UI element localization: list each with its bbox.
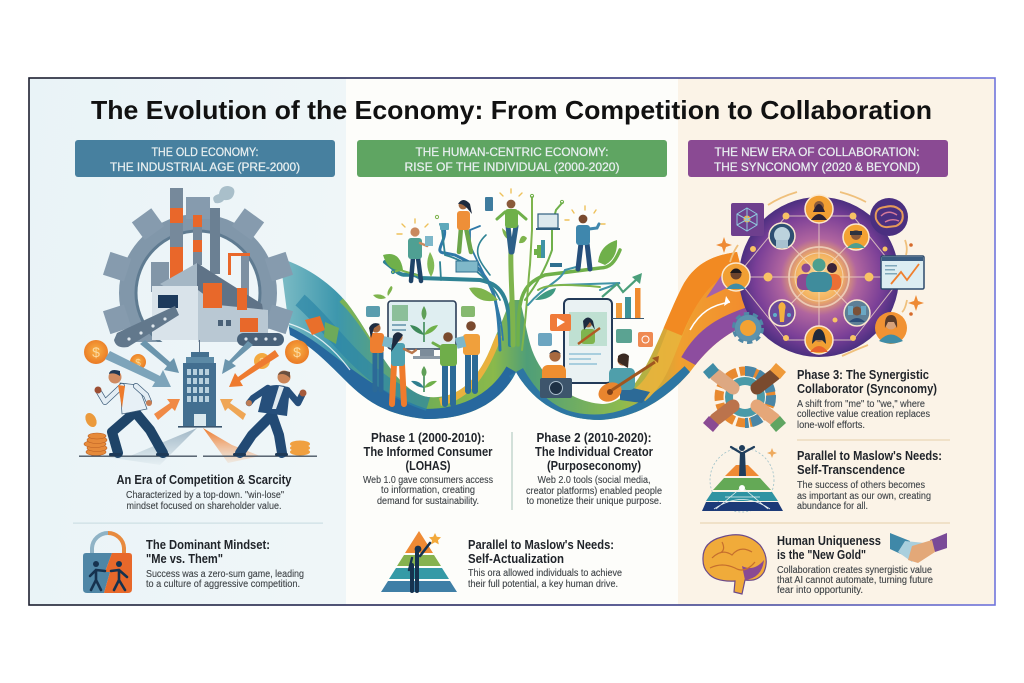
arrows toward tower <box>105 340 279 420</box>
text: phase 2: to monetize their unique purpose. <box>526 496 662 507</box>
tree gadgets <box>440 197 562 272</box>
text: phase 3 <box>797 368 937 431</box>
text: self-transcendence: Parallel to Maslow's Needs: <box>797 449 942 463</box>
text: phase 1: Web 1.0 gave consumers access <box>363 475 493 486</box>
text: self-actualization: Parallel to Maslow's Needs: <box>468 538 614 552</box>
icon: network tile <box>731 203 764 236</box>
figure: guitarist <box>595 354 659 405</box>
figure: man with tablet on branch <box>397 219 433 281</box>
text: human uniqueness <box>777 534 933 596</box>
panel: old economy contents <box>73 140 335 593</box>
heading: old economy: THE OLD ECONOMY: <box>152 145 258 159</box>
text: era of competition <box>116 473 292 512</box>
text: self-actualization: This ora allowed individuals to achieve <box>468 568 622 579</box>
icon: brain <box>703 535 766 594</box>
heading: human-centric economy <box>357 140 667 177</box>
icon: smartphone with creator <box>564 299 612 383</box>
text: phase 2: creator platforms) enabled people <box>526 486 662 497</box>
center people <box>797 258 841 292</box>
text: phase 3: collective value creation replaces <box>797 409 930 420</box>
text: phase 1: The Informed Consumer <box>364 445 493 459</box>
text: phase 2: The Individual Creator <box>535 445 653 459</box>
heading: new era <box>688 140 948 177</box>
text: phase 3: Phase 3: The Synergistic <box>797 368 929 382</box>
figure: running man, white shirt <box>94 370 169 456</box>
panel: collaboration background <box>678 78 995 605</box>
ground shadows <box>79 428 317 465</box>
icon: coins: $ <box>293 344 301 360</box>
icon: desktop with plant <box>366 301 475 392</box>
tree of circuit branches <box>385 194 620 350</box>
icon: gear <box>103 197 293 342</box>
icon: hands on gear <box>703 363 786 432</box>
text: phase 1: demand for sustainability. <box>377 496 479 507</box>
heading: human-centric economy: THE HUMAN-CENTRIC ECONOMY: <box>416 145 608 159</box>
text: phase 1: Phase 1 (2000-2010): <box>371 431 485 445</box>
figure: group at desktop <box>369 321 480 404</box>
figure: man with phone on branch <box>565 206 605 269</box>
text: phase 3: lone-wolf efforts. <box>797 420 865 431</box>
panel: human-centric contents <box>357 140 667 592</box>
text: self-actualization: their full potential, a key human drive. <box>468 579 618 590</box>
panel: collaboration contents <box>688 140 950 596</box>
icon: gear with orange core <box>734 314 762 342</box>
infographic <box>28 77 996 606</box>
flowing ribbon <box>282 252 748 420</box>
text: phase 2 <box>526 431 662 507</box>
icons: social bubbles <box>538 314 653 347</box>
chart: rising bars and arrow <box>602 273 644 319</box>
text: dominant mindset <box>146 538 304 590</box>
text: self-transcendence: Self-Transcendence <box>797 463 905 477</box>
text: self-actualization: Self-Actualization <box>468 552 564 566</box>
icon: dashboard chart <box>881 256 924 289</box>
text: era of competition: mindset focused on shareholder value. <box>126 501 282 512</box>
icon: office tower <box>178 340 222 428</box>
text: era of competition: An Era of Competition & Scarcity <box>116 473 292 487</box>
heading: old economy: THE INDUSTRIAL AGE (PRE-2000) <box>110 160 300 174</box>
title: The Evolution of the Economy: From Competition to Collaboration <box>91 95 932 125</box>
icon: handshake <box>890 533 947 563</box>
text: phase 1: (LOHAS) <box>406 459 450 473</box>
text: phase 3: A shift from "me" to "we," where <box>797 399 925 410</box>
icon: lock with opposing figures <box>83 533 132 593</box>
tree leaves <box>373 228 617 301</box>
heading: new era: THE SYNCONOMY (2020 & BEYOND) <box>714 160 920 174</box>
text: phase 2: Phase 2 (2010-2020): <box>536 431 652 445</box>
text: human uniqueness: is the "New Gold" <box>777 548 866 562</box>
icon: coins: $ <box>135 358 141 369</box>
text: dominant mindset: Success was a zero-sum game, leading <box>146 569 304 580</box>
text: phase 2: Web 2.0 tools (social media, <box>538 475 650 486</box>
icon: transcendence pyramid <box>702 445 783 512</box>
icon: maslow pyramid with figure <box>381 531 457 592</box>
text: human uniqueness: Collaboration creates synergistic value <box>777 565 932 576</box>
text: human uniqueness: Human Uniqueness <box>777 534 881 548</box>
text: dominant mindset: "Me vs. Them" <box>146 552 223 566</box>
text: human uniqueness: fear into opportunity. <box>777 585 863 596</box>
text: human uniqueness: that AI cannot automate, turning future <box>777 575 933 586</box>
panel: human-centric background <box>346 78 678 605</box>
text: self-transcendence: abundance for all. <box>797 501 868 512</box>
text: dominant mindset: The Dominant Mindset: <box>146 538 270 552</box>
text: self-transcendence <box>797 449 942 512</box>
figure: running man, dark suit <box>233 370 306 456</box>
text: era of competition: Characterized by a top-down. "win-lose" <box>126 490 284 501</box>
heading: new era: THE NEW ERA OF COLLABORATION: <box>714 145 920 159</box>
icon: coins: $ <box>259 357 265 368</box>
text: phase 1: to information, creating <box>381 485 475 496</box>
text: phase 2: (Purposeconomy) <box>547 459 641 473</box>
text: self-transcendence: as important as our own, creating <box>797 491 931 502</box>
decorative sparkles and arcs <box>716 192 924 356</box>
icon: brain orb <box>870 198 908 236</box>
arrowhead on ribbon <box>724 296 730 306</box>
figure: meditating man on branch <box>497 189 526 252</box>
text: self-transcendence: The success of others becomes <box>797 480 925 491</box>
text: phase 3: Collaborator (Synconomy) <box>797 382 937 396</box>
outer frame <box>29 78 995 605</box>
icon: coins <box>83 340 310 456</box>
avatar nodes <box>722 195 907 354</box>
text: self-actualization <box>468 538 622 590</box>
panel: old economy background <box>29 78 346 605</box>
icon: coins: $ <box>92 344 100 360</box>
icon: factory <box>114 186 284 347</box>
heading: human-centric economy: RISE OF THE INDIVIDUAL (2000-2020) <box>404 160 620 174</box>
figure: photographer <box>540 350 572 398</box>
text: dominant mindset: to a culture of aggressive competition. <box>146 579 300 590</box>
heading: old economy <box>75 140 335 177</box>
text: phase 1 <box>363 431 493 507</box>
figure: woman with phone on branch <box>457 200 472 252</box>
network globe <box>736 197 902 357</box>
